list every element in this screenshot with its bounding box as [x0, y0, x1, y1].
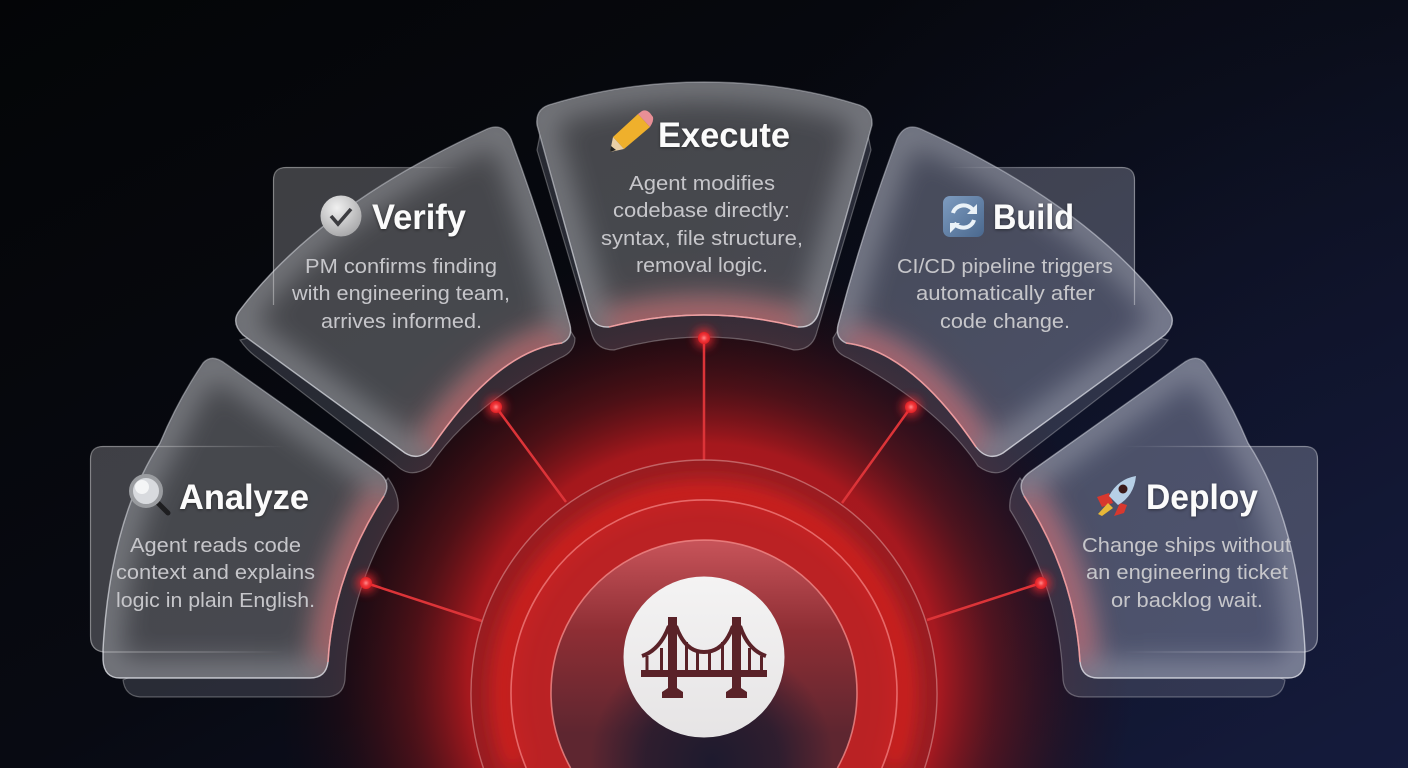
heading: verify: Verify: [372, 198, 467, 237]
text: execute description: syntax, file structure,: [601, 227, 803, 250]
icon: rocket: [1097, 476, 1136, 516]
text: build description: code change.: [940, 310, 1070, 333]
icon: refresh arrows: [943, 196, 984, 237]
panel: deploy: [1010, 358, 1318, 697]
text: deploy description: or backlog wait.: [1111, 589, 1263, 612]
icon: bridge: [641, 617, 767, 698]
text: analyze description: logic in plain English.: [116, 589, 315, 612]
connector: execute: [703, 338, 705, 460]
icon: check mark: [320, 196, 362, 236]
heading: analyze: Analyze: [179, 478, 309, 517]
panel: execute: [537, 82, 872, 350]
text: build description: automatically after: [916, 282, 1095, 305]
connector: verify: [496, 407, 566, 502]
text: verify description: with engineering team,: [291, 282, 510, 305]
panel: build: [833, 127, 1172, 473]
node dots: [357, 329, 1050, 592]
connector: deploy: [927, 583, 1041, 620]
text: deploy description: an engineering ticket: [1086, 561, 1288, 584]
text: verify description: arrives informed.: [321, 310, 482, 333]
text: analyze description: Agent reads code: [130, 534, 301, 557]
panel: verify: [236, 127, 575, 473]
icon: magnifying glass: [131, 476, 168, 513]
central hub: bridge badge: [624, 576, 784, 738]
text: analyze description: [116, 534, 315, 612]
icon: pencil: [610, 110, 653, 152]
text: analyze description: context and explains: [116, 561, 315, 584]
text: verify description: PM confirms finding: [305, 255, 497, 278]
heading: deploy: Deploy: [1146, 478, 1258, 517]
text: build description: CI/CD pipeline triggers: [897, 255, 1113, 278]
text: deploy description: [1082, 534, 1291, 612]
text: build description: [897, 255, 1113, 333]
text: execute description: Agent modifies: [629, 172, 775, 195]
text: execute description: codebase directly:: [613, 199, 790, 222]
heading: execute: Execute: [658, 116, 790, 155]
central hub rings: [471, 460, 937, 768]
connector: build: [842, 407, 911, 503]
text: execute description: removal logic.: [636, 254, 768, 277]
text: execute description: [601, 172, 803, 277]
panel: analyze: [90, 358, 398, 697]
text: deploy description: Change ships without: [1082, 534, 1291, 557]
text: verify description: [291, 255, 510, 333]
connector: analyze: [366, 583, 482, 621]
heading: build: Build: [993, 198, 1074, 237]
